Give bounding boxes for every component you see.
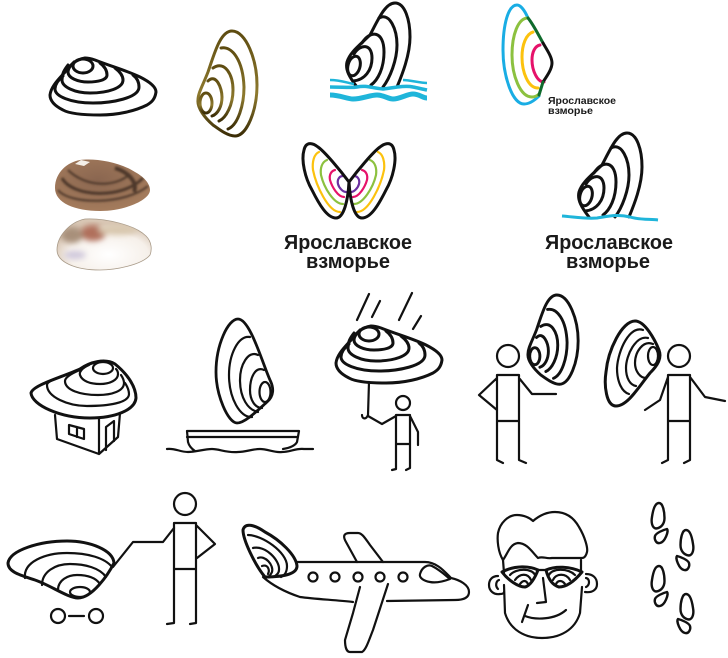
icon: shell in waves	[330, 3, 427, 99]
logo: butterfly of two shells with wordmark: Ярославское	[284, 232, 412, 254]
logo: shell on a single wave with wordmark	[545, 133, 673, 273]
photo: brown shell exterior	[55, 160, 150, 211]
icon: airplane with shell tail	[243, 525, 469, 652]
photo: pearly shell interior	[57, 219, 151, 270]
logo: colored shell with wordmark	[503, 5, 616, 117]
logo: shell on a single wave with wordmark: Ярославское	[545, 232, 673, 254]
icon: black horizontal shell	[50, 58, 156, 115]
logo: colored shell with wordmark: взморье	[548, 106, 593, 117]
icon: person presenting shell on the right	[605, 321, 725, 463]
icon: person presenting shell on the left	[479, 295, 578, 463]
icon: shell sail boat	[167, 319, 313, 452]
icon: face with shell glasses	[489, 512, 597, 638]
logo: butterfly of two shells with wordmark	[284, 144, 412, 273]
icon: shell umbrella in rain with person	[336, 293, 442, 470]
logo: colored shell with wordmark: Ярославское	[548, 96, 616, 107]
icon: gold vertical shell	[198, 31, 257, 136]
icon: shell-roofed house	[31, 361, 136, 454]
logo: butterfly of two shells with wordmark: взморье	[306, 251, 390, 273]
icon: footprints	[652, 503, 693, 633]
logo: shell on a single wave with wordmark: взморье	[566, 251, 650, 273]
icon: person pushing shell cart	[8, 493, 215, 624]
